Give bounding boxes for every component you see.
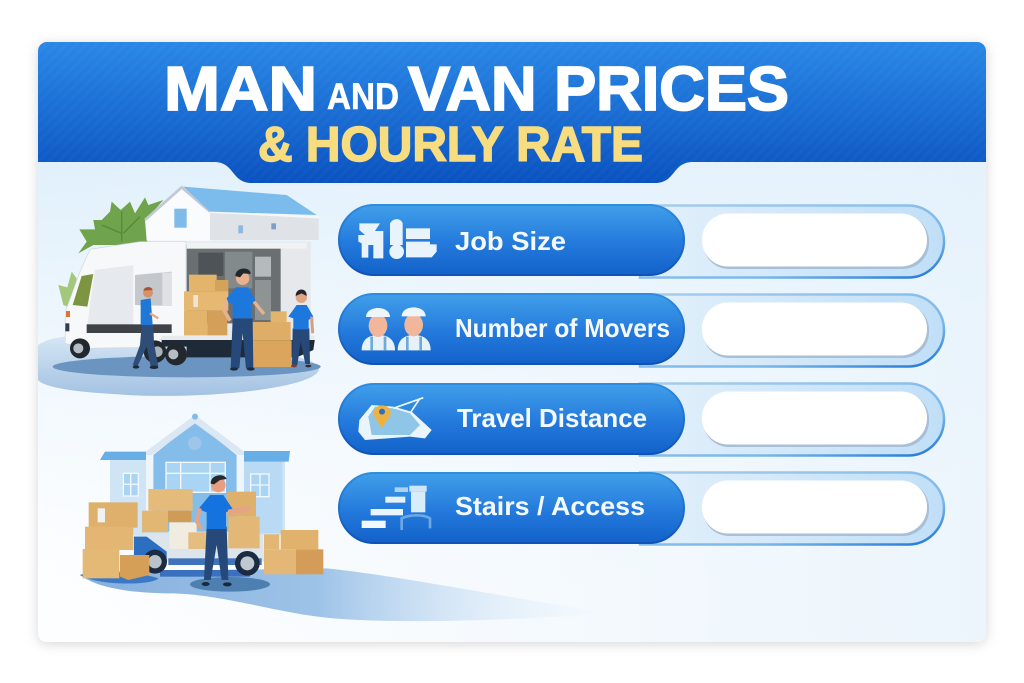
label pill bbox=[339, 294, 684, 364]
header banner bbox=[38, 42, 986, 183]
icon: two movers bbox=[362, 307, 431, 350]
ground shadow smear bbox=[80, 568, 610, 621]
label: Number of Movers bbox=[455, 313, 670, 343]
panel: row number of movers bbox=[339, 294, 944, 366]
value box bbox=[702, 302, 929, 358]
label pill bbox=[339, 205, 684, 275]
icon: map with pin bbox=[358, 398, 432, 440]
green plants bbox=[58, 197, 163, 308]
illustration: mover with boxes and pickup at blue house bbox=[80, 414, 610, 621]
value box bbox=[702, 480, 929, 536]
box stacks bbox=[83, 489, 323, 580]
value box bbox=[702, 392, 929, 447]
boxes on van bbox=[184, 275, 292, 367]
label: Travel Distance bbox=[457, 403, 647, 433]
blue house bbox=[100, 414, 290, 535]
house bbox=[145, 187, 319, 337]
label: Job Size bbox=[455, 226, 566, 256]
illustration: movers loading van at house bbox=[38, 187, 321, 396]
panel: row job size bbox=[339, 205, 944, 278]
title bbox=[164, 55, 789, 172]
title: MAN bbox=[164, 55, 317, 124]
van bbox=[65, 242, 315, 365]
ground shadow bbox=[38, 336, 321, 396]
track bbox=[640, 384, 944, 456]
track bbox=[640, 472, 944, 544]
pickup truck bbox=[133, 535, 264, 577]
icon: furniture and boxes bbox=[358, 219, 437, 259]
mover bbox=[197, 475, 250, 586]
title: & HOURLY RATE bbox=[258, 118, 643, 172]
title: AND bbox=[327, 76, 399, 117]
mover right bbox=[288, 289, 313, 367]
mover left bbox=[133, 287, 158, 369]
label pill bbox=[339, 384, 684, 454]
mover centre bbox=[224, 268, 264, 371]
label pill bbox=[339, 473, 684, 543]
track bbox=[640, 206, 944, 278]
value box bbox=[702, 214, 929, 269]
panel: row travel distance bbox=[339, 384, 944, 456]
track bbox=[640, 294, 944, 366]
label: Stairs / Access bbox=[455, 491, 645, 521]
icon: stairs bbox=[362, 486, 430, 530]
panel: row stairs access bbox=[339, 472, 944, 544]
title: VAN PRICES bbox=[408, 55, 789, 124]
